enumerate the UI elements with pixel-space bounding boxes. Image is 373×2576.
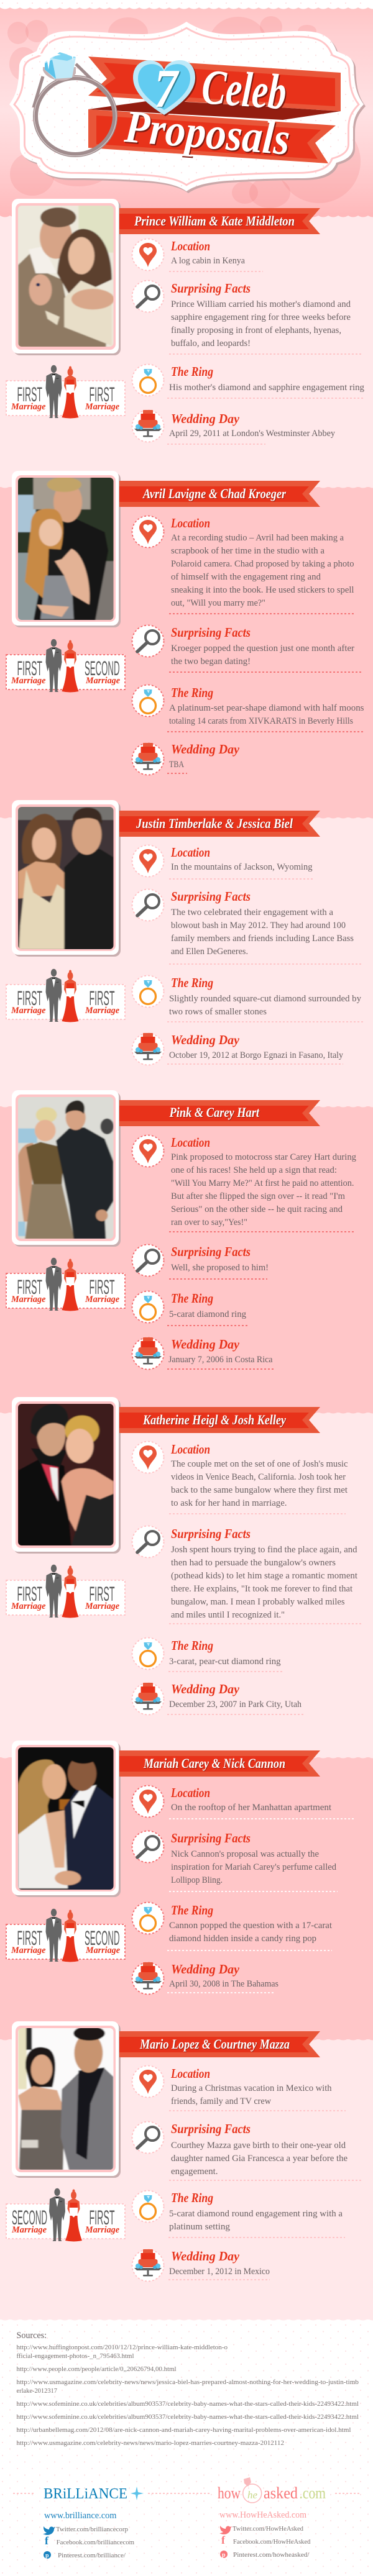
- wedding day: [132, 2249, 270, 2281]
- panel: Avril Lavigne & Chad Kroeger: [6, 471, 364, 775]
- heading: Celeb: Celeb: [200, 60, 288, 120]
- panel: Mario Lopez & Courtney Mazza: [6, 2021, 362, 2281]
- sources list: Sources:: [16, 2331, 47, 2341]
- name ribbon: [119, 2031, 320, 2057]
- location: At a recording studio – Avril had been making a: [171, 533, 344, 543]
- marriage badge: Marriage: [11, 2225, 47, 2235]
- surprising facts: then had to persuade the bungalow's owners: [171, 1558, 336, 1568]
- location: videos in Venice Beach, California. Josh took her: [171, 1472, 346, 1482]
- marriage badge: FIRST: [90, 383, 114, 406]
- marriage badge: FIRST: [17, 987, 42, 1009]
- panel: Mariah Carey & Nick Cannon: SECOND: [85, 1927, 119, 1949]
- photo card: [12, 1397, 121, 1554]
- the ring: platinum setting: [169, 2222, 230, 2232]
- panel: Katherine Heigl & Josh Kelley: [6, 1397, 362, 1714]
- surprising facts: and miles until I recognized it.": [171, 1610, 285, 1620]
- location: [132, 2066, 346, 2111]
- the ring: The Ring: [171, 1638, 213, 1653]
- name ribbon: [119, 208, 320, 234]
- sources list: fficial-engagement-photos-_n_795463.html: [16, 2353, 134, 2360]
- surprising facts: the two began dating!: [171, 657, 251, 667]
- marriage badge: FIRST: [17, 1276, 42, 1298]
- location: A log cabin in Kenya: [171, 256, 246, 266]
- panel: Justin Timberlake & Jessica Biel: [6, 800, 364, 1065]
- heading: Celeb: Celeb: [201, 61, 289, 122]
- name ribbon: [119, 481, 320, 507]
- marriage badge: FIRST: [90, 987, 114, 1009]
- surprising facts: [132, 1831, 338, 1891]
- icon: twitter: [219, 2526, 232, 2534]
- the ring: The Ring: [171, 364, 213, 379]
- location: [132, 1135, 356, 1232]
- surprising facts: (pothead kids) to let him stage a romantic moment: [171, 1571, 357, 1581]
- location: Polaroid camera. Chad proposed by taking a photo: [171, 559, 354, 569]
- heart with number 7: 7: [155, 60, 181, 120]
- name ribbon: Prince William & Kate Middleton: [134, 213, 295, 229]
- marriage badge: FIRST: [90, 2206, 114, 2229]
- surprising facts: [132, 281, 362, 354]
- sources list: http://www.people.com/people/article/0,,20626794,00.html: [16, 2366, 177, 2373]
- the ring: [132, 1291, 248, 1326]
- surprising facts: Surprising Facts: [171, 1244, 251, 1259]
- the ring: The Ring: [171, 685, 213, 700]
- wedding day: Wedding Day: [171, 1337, 240, 1352]
- name ribbon: [119, 1100, 320, 1126]
- surprising facts: Surprising Facts: [171, 281, 251, 296]
- ring illustration: [34, 41, 116, 156]
- Brilliance links: Twitter.com/brilliancecorp: [56, 2526, 128, 2533]
- wedding day: [132, 1962, 279, 1994]
- location: [132, 1785, 355, 1819]
- wedding day: Wedding Day: [171, 1962, 240, 1977]
- the ring: His mother's diamond and sapphire engagement ring: [169, 383, 364, 393]
- panel: Prince William & Kate Middleton: [6, 199, 364, 444]
- heading: Proposals: Proposals: [124, 102, 293, 166]
- wedding day: [132, 410, 336, 444]
- marriage badge: [6, 365, 125, 419]
- name ribbon: Mariah Carey & Nick Cannon: [144, 1756, 286, 1772]
- marriage badge: [6, 1258, 125, 1311]
- heart with number 7: [133, 59, 196, 120]
- marriage badge: Marriage: [85, 676, 120, 686]
- sources list: [16, 2331, 359, 2447]
- sources list: http://www.usmagazine.com/celebrity-news/news/mario-lopez-marries-courtney-mazza-2012112: [16, 2440, 284, 2447]
- the ring: [132, 975, 364, 1022]
- Brilliance links: www.brilliance.com: [44, 2511, 117, 2521]
- marriage badge: Marriage: [85, 1006, 119, 1016]
- logo: How He Asked: asked: [264, 2484, 298, 2502]
- surprising facts: Kroeger popped the question just one month after: [171, 644, 354, 653]
- marriage badge: FIRST: [17, 1583, 42, 1605]
- icon: pinterest: [220, 2551, 228, 2559]
- panel: Pink & Carey Hart: [6, 1090, 356, 1369]
- name ribbon: Katherine Heigl & Josh Kelley: [142, 1412, 286, 1427]
- the ring: totaling 14 carats from XIVKARATS in Beverly Hills: [169, 716, 353, 726]
- sources list: http://www.huffingtonpost.com/2010/12/12/prince-william-kate-middleton-o: [16, 2344, 228, 2351]
- the ring: 5-carat diamond ring: [169, 1309, 246, 1319]
- marriage badge: Marriage: [85, 1946, 120, 1955]
- icon: pinterest: [44, 2551, 51, 2559]
- location: Location: [170, 845, 210, 860]
- sources list: http://www.sofeminine.co.uk/celebrities/album903537/celebrity-baby-names-what-the-stars-called-their-kids-22493422.html: [16, 2401, 359, 2408]
- the ring: [132, 685, 364, 732]
- location: In the mountains of Jackson, Wyoming: [171, 862, 312, 872]
- name ribbon: Katherine Heigl & Josh Kelley: [143, 1413, 287, 1428]
- How He Asked links: Pinterest.com/howheasked/: [233, 2552, 310, 2559]
- the ring: A platinum-set pear-shape diamond with half moons: [169, 703, 364, 713]
- wedding day: TBA: [169, 760, 184, 770]
- How He Asked links: Facebook.com/HowHeAsked: [233, 2539, 311, 2546]
- name ribbon: Justin Timberlake & Jessica Biel: [136, 816, 293, 831]
- wedding day: Wedding Day: [171, 411, 240, 426]
- location: [132, 1441, 348, 1514]
- surprising facts: buffalo, and leopards!: [171, 339, 251, 348]
- wedding day: [132, 1032, 344, 1065]
- icon: pinterest: p: [45, 2552, 49, 2559]
- marriage badge: [6, 2188, 125, 2241]
- marriage badge: FIRST: [90, 1583, 114, 1605]
- wedding day: January 7, 2006 in Costa Rica: [168, 1355, 273, 1365]
- location: sneaking it into the book. He used stickers to spell: [171, 585, 354, 595]
- wedding day: Wedding Day: [171, 2249, 240, 2264]
- wedding day: April 30, 2008 in The Bahamas: [169, 1979, 279, 1989]
- location: During a Christmas vacation in Mexico with: [171, 2083, 332, 2093]
- surprising facts: bungalow, man. I mean I probably walked miles: [171, 1597, 345, 1607]
- location: back to the same bungalow where they first met: [171, 1485, 348, 1495]
- surprising facts: The two celebrated their engagement with a: [171, 908, 334, 917]
- marriage badge: Marriage: [11, 402, 46, 412]
- marriage badge: [6, 1909, 125, 1962]
- marriage badge: FIRST: [17, 657, 42, 680]
- location: ran over to say,"Yes!": [171, 1217, 247, 1227]
- wedding day: [132, 742, 240, 775]
- marriage badge: Marriage: [85, 1295, 119, 1304]
- title plaque: [9, 22, 366, 193]
- red title ribbon: [88, 57, 341, 163]
- marriage badge: Marriage: [85, 2225, 119, 2235]
- location: Location: [170, 1135, 210, 1150]
- wedding day: Wedding Day: [171, 742, 240, 757]
- location: to ask for her hand in marriage.: [171, 1498, 287, 1508]
- location: On the rooftop of her Manhattan apartment: [171, 1803, 331, 1813]
- name ribbon: [119, 811, 320, 837]
- icon: twitter: [43, 2526, 55, 2535]
- the ring: two rows of smaller stones: [169, 1007, 267, 1017]
- Brilliance links: Pinterest.com/brilliance/: [58, 2552, 126, 2559]
- surprising facts: daughter named Gia Francesca a year before the: [171, 2154, 348, 2164]
- icon: facebook: f: [45, 2534, 49, 2547]
- the ring: Slightly rounded square-cut diamond surrounded by: [169, 994, 362, 1004]
- location: of himself with the engagement ring and: [171, 572, 321, 582]
- sources list: http://urbanbellemag.com/2012/08/are-nick-cannon-and-mariah-carey-having-marital-problems-over-american-idol.html: [16, 2427, 351, 2434]
- logo: How He Asked: .com: [300, 2484, 326, 2502]
- location: [132, 239, 263, 271]
- location: [132, 845, 315, 879]
- marriage badge: [6, 639, 125, 692]
- wedding day: April 29, 2011 at London's Westminster Abbey: [169, 429, 336, 439]
- location: scrapbook of her time in the studio with a: [171, 546, 325, 556]
- marriage badge: Marriage: [85, 402, 119, 412]
- logo: How He Asked: [218, 2477, 326, 2503]
- surprising facts: [132, 625, 362, 672]
- marriage badge: [6, 969, 125, 1022]
- the ring: The Ring: [171, 2190, 213, 2205]
- surprising facts: blowout bash in May 2012. They had around 100: [171, 921, 346, 931]
- logo: How He Asked: how: [218, 2484, 241, 2502]
- surprising facts: Courthey Mazza gave birth to their one-year old: [171, 2141, 346, 2150]
- location: The couple met on the set of one of Josh's music: [171, 1459, 348, 1469]
- the ring: The Ring: [171, 975, 213, 990]
- name ribbon: Pink & Carey Hart: [169, 1104, 260, 1120]
- marriage badge: FIRST: [17, 1927, 42, 1949]
- the ring: [132, 2190, 345, 2237]
- surprising facts: there. He explains, "It took me forever to find that: [171, 1584, 352, 1594]
- logo: Brilliance: BRiLLiANCE: [44, 2486, 127, 2502]
- surprising facts: family members and friends including Lance Bass: [171, 934, 354, 944]
- location: Location: [170, 516, 210, 530]
- surprising facts: finally proposing in front of elephants, hyenas,: [171, 325, 341, 335]
- wedding day: December 1, 2012 in Mexico: [169, 2267, 270, 2277]
- marriage badge: Marriage: [11, 1946, 46, 1955]
- marriage badge: Marriage: [11, 1006, 46, 1016]
- wedding day: December 23, 2007 in Park City, Utah: [169, 1700, 302, 1709]
- marriage badge: SECOND: [12, 2206, 47, 2229]
- location: Location: [170, 1442, 210, 1457]
- name ribbon: [119, 1407, 320, 1433]
- name ribbon: Avril Lavigne & Chad Kroeger: [142, 486, 287, 502]
- location: Serious" on the other side -- he quit racing and: [171, 1204, 343, 1214]
- location: Pink proposed to motocross star Carey Hart during: [171, 1152, 356, 1162]
- wedding day: [132, 1682, 304, 1714]
- surprising facts: engagement.: [171, 2167, 218, 2177]
- surprising facts: Surprising Facts: [171, 1526, 251, 1541]
- wedding day: [132, 1337, 274, 1369]
- surprising facts: Lollipop Bling.: [171, 1875, 223, 1885]
- surprising facts: Surprising Facts: [171, 625, 251, 640]
- header decorative circles: [7, 16, 361, 208]
- surprising facts: sapphire engagement ring for three weeks before: [171, 312, 351, 322]
- marriage badge: Marriage: [85, 1601, 119, 1611]
- location: friends, family and TV crew: [171, 2096, 272, 2106]
- surprising facts: [132, 1526, 362, 1624]
- location: But after she flipped the sign over -- it read "I'm: [171, 1191, 346, 1201]
- the ring: diamond hidden inside a candy ring pop: [169, 1934, 316, 1944]
- location: "Will You Marry Me?" At first he paid no attention.: [171, 1178, 354, 1188]
- Brilliance links: [43, 2511, 134, 2559]
- the ring: [132, 364, 364, 398]
- the ring: [132, 1637, 284, 1672]
- name ribbon: [119, 1750, 320, 1777]
- surprising facts: Well, she proposed to him!: [171, 1263, 269, 1273]
- sources list: http://www.sofeminine.co.uk/celebrities/album903537/celebrity-baby-names-what-the-stars-called-their-kids-22493422.html: [16, 2414, 359, 2421]
- photo card: [12, 800, 121, 957]
- How He Asked links: Twitter.com/HowHeAsked: [233, 2526, 304, 2533]
- surprising facts: Surprising Facts: [171, 2121, 251, 2136]
- surprising facts: Prince William carried his mother's diamond and: [171, 299, 351, 309]
- photo card: [12, 199, 121, 355]
- name ribbon: Mariah Carey & Nick Cannon: [143, 1755, 285, 1771]
- logo: How He Asked: he: [247, 2489, 257, 2501]
- location: Location: [170, 1785, 210, 1800]
- surprising facts: [132, 889, 362, 964]
- location: [132, 516, 354, 614]
- name ribbon: Mario Lopez & Courtney Mazza: [139, 2036, 290, 2052]
- the ring: The Ring: [171, 1291, 213, 1306]
- marriage badge: Marriage: [11, 1295, 46, 1304]
- location: one of his races! She held up a sign that read:: [171, 1165, 337, 1175]
- the ring: The Ring: [171, 1903, 213, 1918]
- icon: pinterest: p: [222, 2552, 226, 2559]
- surprising facts: Surprising Facts: [171, 1831, 251, 1846]
- surprising facts: Surprising Facts: [171, 889, 251, 904]
- marriage badge: [6, 1565, 125, 1618]
- photo card: [12, 1741, 121, 1897]
- marriage badge: FIRST: [17, 383, 42, 406]
- name ribbon: Pink & Carey Hart: [170, 1105, 260, 1121]
- the ring: 3-carat, pear-cut diamond ring: [169, 1657, 281, 1667]
- How He Asked links: www.HowHeAsked.com: [219, 2510, 306, 2520]
- location: Location: [170, 239, 210, 253]
- heart with number 7: 7: [154, 59, 180, 119]
- name ribbon: Avril Lavigne & Chad Kroeger: [142, 486, 286, 501]
- surprising facts: [132, 1244, 269, 1279]
- Brilliance links: Facebook.com/brilliancecom: [57, 2539, 134, 2546]
- wedding day: Wedding Day: [171, 1682, 240, 1696]
- name ribbon: Justin Timberlake & Jessica Biel: [136, 816, 294, 832]
- heading: Proposals: Proposals: [122, 101, 292, 165]
- name ribbon: Prince William & Kate Middleton: [134, 214, 295, 229]
- marriage badge: Marriage: [11, 676, 46, 686]
- wedding day: October 19, 2012 at Borgo Egnazi in Fasano, Italy: [169, 1050, 344, 1060]
- sources list: erlake-2012317: [16, 2388, 57, 2395]
- location: Location: [170, 2066, 210, 2081]
- sources list: http://www.usmagazine.com/celebrity-news/news/jessica-biel-has-prepared-almost-nothing-for-her-wedding-to-justin-timb: [16, 2379, 359, 2386]
- marriage badge: Marriage: [11, 1601, 46, 1611]
- How He Asked links: [219, 2510, 311, 2559]
- name ribbon: Mario Lopez & Courtney Mazza: [140, 2037, 290, 2052]
- surprising facts: [132, 2121, 362, 2180]
- location: out, "Will you marry me?": [171, 598, 265, 608]
- surprising facts: inspiration for Mariah Carey's perfume called: [171, 1862, 337, 1872]
- the ring: [132, 1902, 332, 1950]
- icon: facebook: f: [221, 2534, 226, 2546]
- marriage badge: FIRST: [90, 1276, 114, 1298]
- the ring: Cannon popped the question with a 17-carat: [169, 1921, 332, 1931]
- footer divider dashes: [13, 2493, 360, 2494]
- wedding day: Wedding Day: [171, 1032, 240, 1047]
- photo card: [12, 2021, 121, 2178]
- panel: Mariah Carey & Nick Cannon: [6, 1741, 355, 1994]
- panel: Avril Lavigne & Chad Kroeger: SECOND: [85, 657, 119, 680]
- surprising facts: Nick Cannon's proposal was actually the: [171, 1849, 319, 1859]
- photo card: [12, 1090, 121, 1247]
- photo card: [12, 471, 121, 627]
- surprising facts: and Ellen DeGeneres.: [171, 947, 248, 957]
- surprising facts: Josh spent hours trying to find the place again, and: [171, 1545, 357, 1555]
- the ring: 5-carat diamond round engagement ring with a: [169, 2209, 343, 2219]
